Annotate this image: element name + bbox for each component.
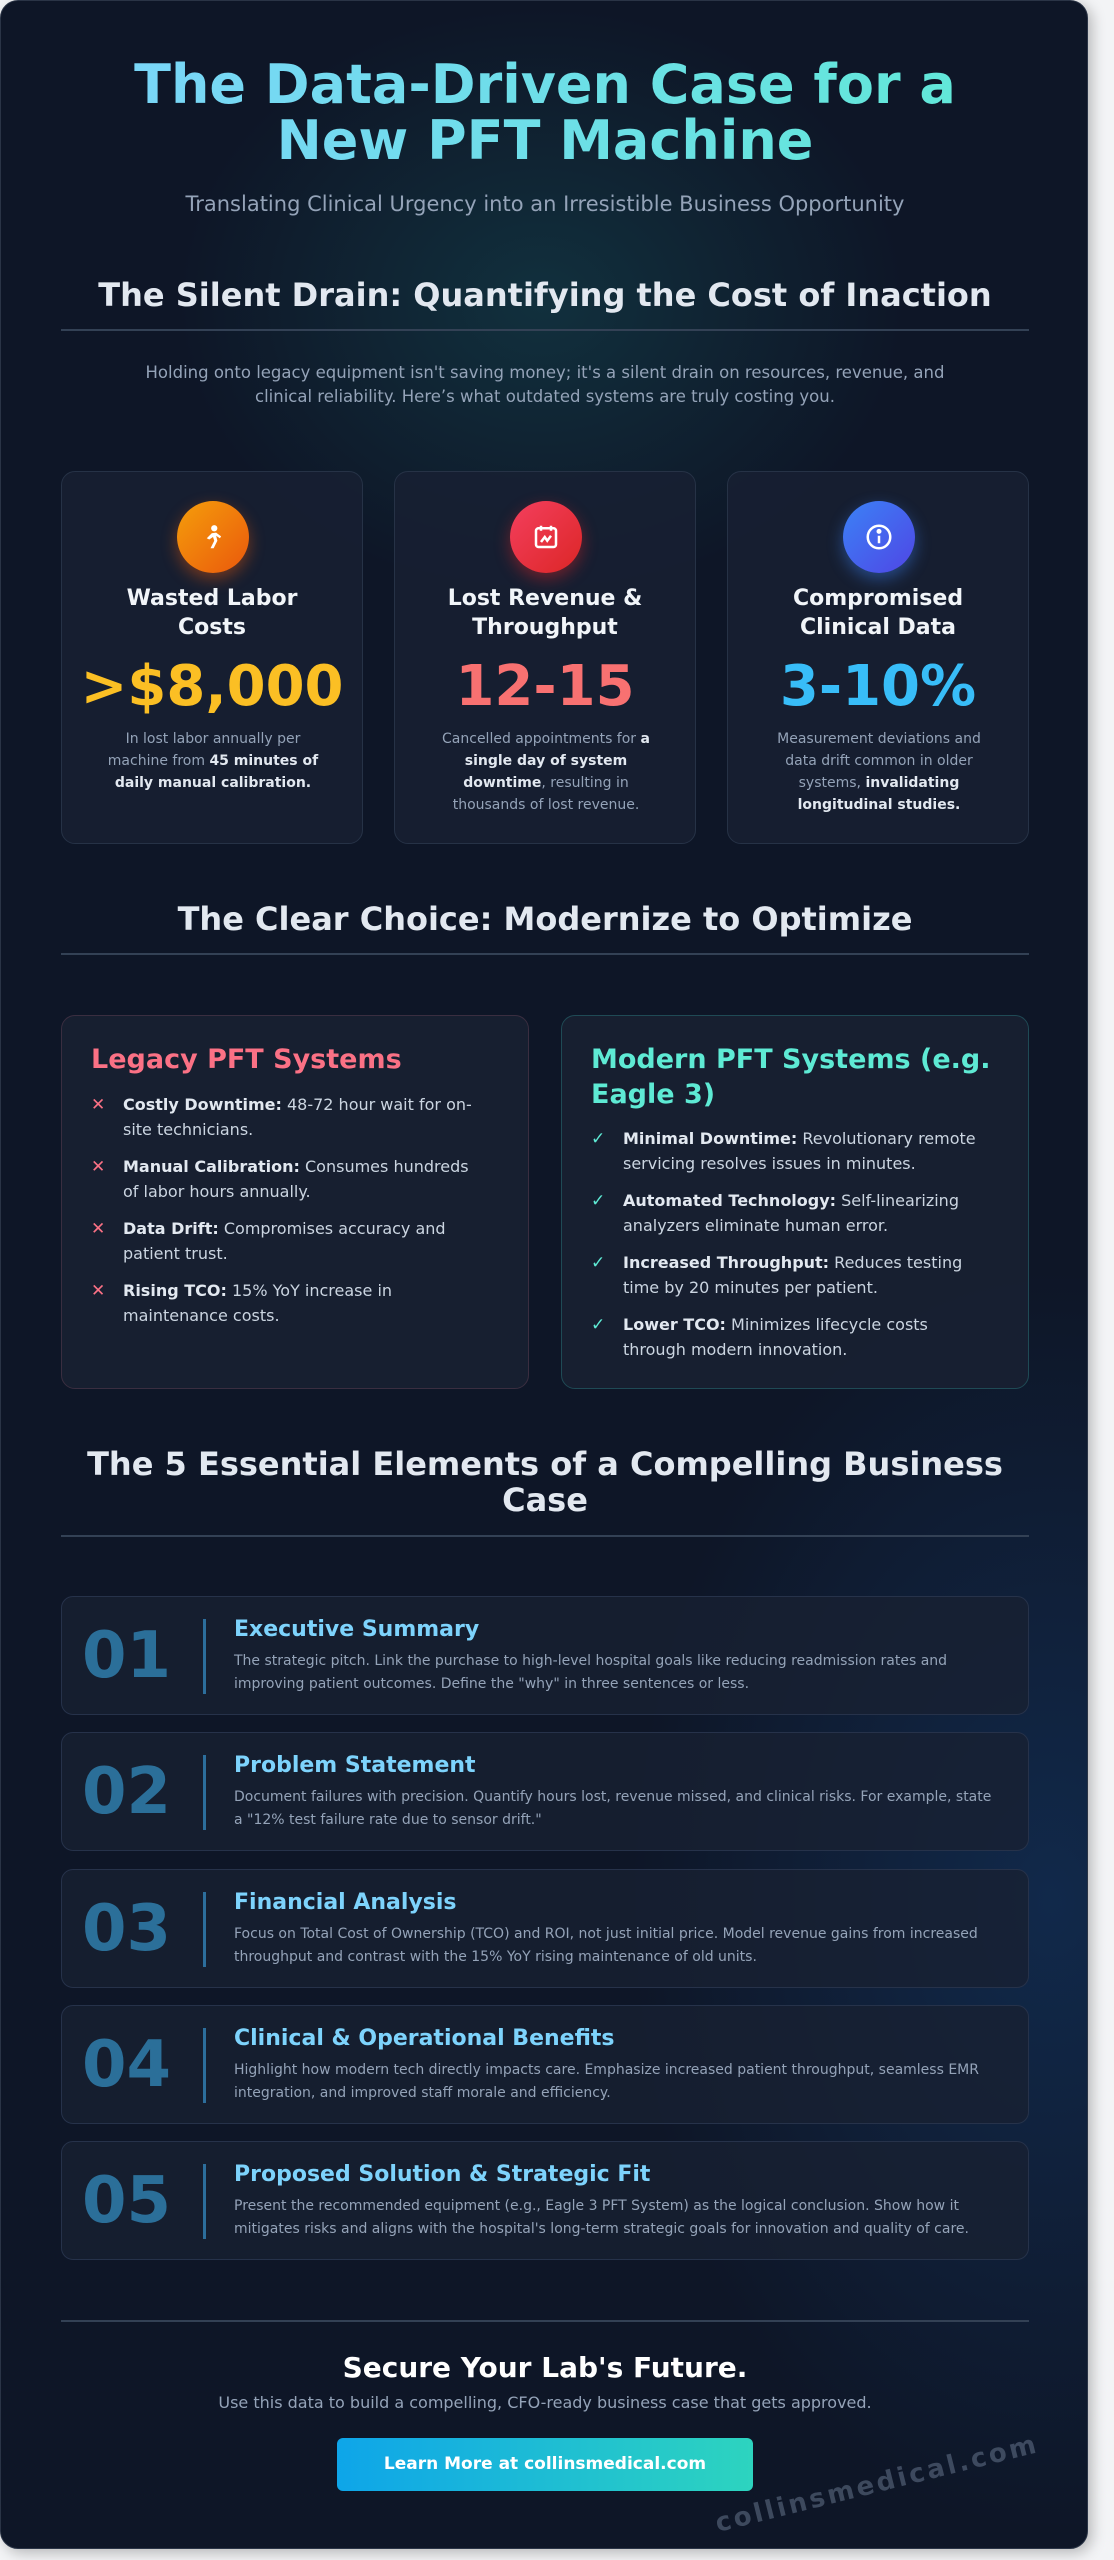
item 05: 05 [82,2164,171,2238]
icon: worker [177,501,249,573]
stat card: data: 3-10% [780,654,976,719]
section heading: 5 elements: The 5 Essential Elements of a Compelling Business Case [87,1445,1003,1519]
panel: modern: ✓ [591,1191,605,1211]
button [337,2438,753,2491]
item 02: Document failures with precision. Quantify hours lost, revenue missed, and clinical risks. For example, state a "12% test failure rate due to sensor drift." [234,1789,991,1828]
item 01: Executive Summary [234,1617,479,1642]
icon: info [843,501,915,573]
panel: modern: Lower TCO: Minimizes lifecycle costs through modern innovation. [623,1315,928,1359]
panel: legacy: ✕ [91,1281,105,1301]
item 02: 02 [82,1755,171,1829]
section heading: clear choice: The Clear Choice: Modernize to Optimize [178,900,912,938]
item 05: Proposed Solution & Strategic Fit [234,2162,650,2187]
panel: legacy: ✕ [91,1095,105,1115]
item 05 [61,2141,1029,2260]
panel: legacy: ✕ [91,1157,105,1177]
item 01: The strategic pitch. Link the purchase to high-level hospital goals like reducing readmission rates and improving patient outcomes. Define the "why" in three sentences or less. [234,1653,947,1692]
stat card: lost revenue: 12-15 [455,654,635,719]
subtitle: Translating Clinical Urgency into an Irresistible Business Opportunity [186,192,904,216]
item 05: Present the recommended equipment (e.g., Eagle 3 PFT System) as the logical conclusion. Show how it mitigates risks and aligns with the hospital's long-term strategic goals for innovation and quality of care. [234,2198,969,2237]
panel: legacy: Legacy PFT Systems [91,1044,402,1075]
watermark: collinsmedical.com [712,2429,1042,2539]
stat card: data: Clinical Data [800,615,956,640]
icon: calendar [510,501,582,573]
item 03 [61,1869,1029,1988]
panel: modern: ✓ [591,1129,605,1149]
panel: legacy: Manual Calibration: Consumes hundreds of labor hours annually. [123,1157,469,1201]
item 02 [61,1732,1029,1851]
title: New PFT Machine [277,109,813,172]
item 03: Financial Analysis [234,1890,457,1915]
panel: modern: ✓ [591,1315,605,1335]
item 04: 04 [82,2028,171,2102]
stat card: data: Measurement deviations and data drift common in older systems, invalidating longitudinal studies. [777,731,981,813]
panel: modern: Minimal Downtime: Revolutionary remote servicing resolves issues in minutes. [623,1129,976,1173]
panel: legacy: ✕ [91,1219,105,1239]
item 03: Focus on Total Cost of Ownership (TCO) and ROI, not just initial price. Model revenue gains from increased throughput and contrast with the 15% YoY rising maintenance of old units. [234,1926,978,1965]
stat card: lost revenue: Lost Revenue & [448,586,642,611]
panel: legacy: Rising TCO: 15% YoY increase in maintenance costs. [123,1281,392,1325]
footer text: Use this data to build a compelling, CFO-ready business case that gets approved. [218,2393,872,2412]
stat card: lost revenue: Cancelled appointments for a single day of system downtime, resulting in thousands of lost revenue. [442,731,650,813]
section heading: silent drain: The Silent Drain: Quantifying the Cost of Inaction [98,276,992,314]
item 04: Highlight how modern tech directly impacts care. Emphasize increased patient throughput, seamless EMR integration, and improved staff morale and efficiency. [234,2062,979,2101]
panel: modern [561,1015,1029,1389]
stat card: wasted labor: Wasted Labor [127,586,297,611]
stat card: data: Compromised [793,586,963,611]
panel: legacy [61,1015,529,1389]
stat card: wasted labor [61,471,363,844]
item 03: 03 [82,1892,171,1966]
item 01 [61,1596,1029,1715]
stat card: lost revenue [394,471,696,844]
panel: legacy: Costly Downtime: 48-72 hour wait for on-site technicians. [123,1095,472,1139]
panel: modern: Increased Throughput: Reduces testing time by 20 minutes per patient. [623,1253,962,1297]
stat card: wasted labor: In lost labor annually per machine from 45 minutes of daily manual calibration. [108,731,318,791]
intro text: Holding onto legacy equipment isn't saving money; it's a silent drain on resources, revenue, and clinical reliability. Here’s what outdated systems are truly costing you. [146,363,944,406]
item 04: Clinical & Operational Benefits [234,2026,614,2051]
title [1,57,1089,169]
panel: modern: Modern PFT Systems (e.g. Eagle 3) [591,1044,990,1110]
item 02: Problem Statement [234,1753,476,1778]
item 01: 01 [82,1619,171,1693]
stat card: lost revenue: Throughput [472,615,618,640]
panel: modern: Automated Technology: Self-linearizing analyzers eliminate human error. [623,1191,959,1235]
stat card: wasted labor: >$8,000 [80,654,344,719]
panel: legacy: Data Drift: Compromises accuracy and patient trust. [123,1219,446,1263]
footer heading: Secure Your Lab's Future. [343,2351,747,2384]
stat card: data [727,471,1029,844]
stat card: wasted labor: Costs [178,615,246,640]
button: Learn More at collinsmedical.com [384,2454,706,2474]
title: The Data-Driven Case for a [134,53,956,116]
item 04 [61,2005,1029,2124]
panel: modern: ✓ [591,1253,605,1273]
